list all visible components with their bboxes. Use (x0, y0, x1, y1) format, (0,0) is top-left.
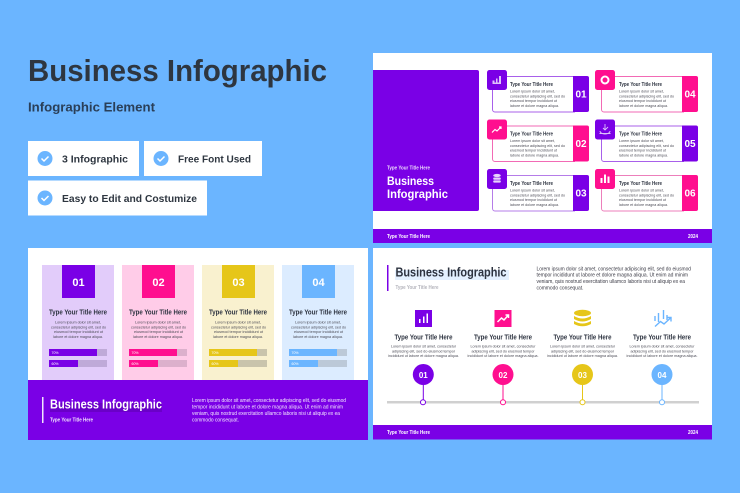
column 01: 60% (52, 362, 59, 366)
step 01 (388, 310, 459, 405)
step 01: adipiscing elit, sed do eiusmod tempor (392, 348, 456, 353)
footer bar: Type Your Title Here (387, 430, 430, 436)
panel: timeline slide (373, 248, 712, 440)
step 02: Type Your Title Here (474, 334, 532, 342)
purple banner: tempor incididunt ut labore et dolore magna aliqua. Ut enim ad minim (192, 404, 343, 410)
step 01: 01 (419, 371, 428, 380)
step 03: Type Your Title Here (554, 334, 612, 342)
card 06: consectetur adipiscing elit, sed do (619, 192, 674, 197)
card 05: 05 (684, 139, 696, 150)
card 04: Type Your Title Here (619, 82, 662, 88)
card 06: Lorem ipsum dolor sit amet, (619, 188, 664, 192)
intro paragraph: commodo consequat. (536, 285, 584, 291)
column 02: Type Your Title Here (129, 310, 187, 316)
card 01: labore et dolore magna aliqua. (510, 103, 559, 108)
card 05: Type Your Title Here (619, 132, 662, 138)
card 04: consectetur adipiscing elit, sed do (619, 93, 674, 98)
feature badge: Free Font Used (144, 141, 262, 176)
purple title block: Business (387, 176, 434, 188)
column 04: 70% (292, 351, 299, 355)
feature badge: Easy to Edit and Costumize: Easy to Edit and Costumize (62, 193, 197, 205)
purple title block: Type Your Title Here (387, 165, 430, 171)
feature badge: 3 Infographic: 3 Infographic (62, 154, 128, 166)
step 03: 03 (578, 371, 587, 380)
card 02: labore et dolore magna aliqua. (510, 152, 559, 158)
column 04: eiusmod tempor incididunt ut (294, 329, 344, 334)
footer bar: 2024 (688, 234, 698, 240)
heading (387, 264, 509, 291)
column 03: consectetur adipiscing elit, sed do (211, 324, 266, 329)
card 04: eiusmod tempor incididunt ut (619, 98, 667, 103)
card 03: Type Your Title Here (510, 181, 553, 187)
footer bar (373, 425, 712, 440)
card 06: Type Your Title Here (619, 181, 662, 187)
card 05: eiusmod tempor incididunt ut (619, 148, 667, 153)
card 01: eiusmod tempor incididunt ut (510, 98, 558, 103)
column 01 (42, 265, 114, 381)
step 04: Type Your Title Here (633, 334, 691, 342)
column 04: Type Your Title Here (289, 310, 347, 316)
purple banner (28, 380, 368, 440)
column 03: 70% (212, 351, 219, 355)
column 03: labore et dolore magna aliqua. (213, 334, 263, 339)
footer bar (373, 229, 712, 243)
step 04 (626, 310, 698, 405)
step 02: adipiscing elit, sed do eiusmod tempor (472, 348, 535, 353)
column 01: 70% (52, 351, 59, 355)
column 02: 70% (132, 351, 139, 355)
panel: six step slide (373, 53, 712, 243)
card 01 (487, 70, 589, 112)
card 04: Lorem ipsum dolor sit amet, (619, 88, 664, 94)
step 01: Type Your Title Here (394, 334, 453, 342)
column 02: labore et dolore magna aliqua. (133, 334, 183, 339)
heading: Business Infographic (396, 264, 506, 280)
card 01: 01 (575, 90, 587, 100)
column 03: Type Your Title Here (209, 310, 267, 316)
card 03: labore et dolore magna aliqua. (510, 202, 559, 207)
card 06 (595, 169, 698, 211)
card 06: labore et dolore magna aliqua. (619, 202, 668, 207)
step 02: incididunt ut labore et dolore magna aliqua. (468, 353, 538, 358)
column 02: consectetur adipiscing elit, sed do (131, 324, 186, 329)
intro paragraph: tempor incididunt ut labore et dolore magna aliqua. Ut enim ad minim (536, 273, 688, 279)
card 01: consectetur adipiscing elit, sed do (510, 93, 565, 98)
intro paragraph (536, 266, 691, 291)
card 06: 06 (684, 188, 696, 200)
column 04: labore et dolore magna aliqua. (293, 334, 343, 339)
step 03: incididunt ut labore et dolore magna aliqua. (547, 353, 618, 358)
intro paragraph: veniam, quis nostrud exercitation ullamco laboris nisi ut aliquip ex ea (536, 279, 685, 285)
column 03: 03 (232, 277, 245, 289)
feature badge: Easy to Edit and Costumize (28, 180, 207, 216)
timeline track (387, 401, 699, 404)
footer bar: Type Your Title Here (387, 234, 430, 240)
column 04: Lorem ipsum dolor sit amet, (295, 320, 341, 324)
card 04 (595, 70, 698, 112)
footer bar: 2024 (688, 430, 698, 436)
feature badge: Free Font Used: Free Font Used (178, 154, 251, 166)
step 03: adipiscing elit, sed do eiusmod tempor (551, 348, 615, 353)
step 02: Lorem ipsum dolor sit amet, consectetur (470, 344, 536, 348)
column 01: 01 (72, 277, 85, 289)
feature badge: 3 Infographic (28, 141, 139, 176)
card 03: eiusmod tempor incididunt ut (510, 197, 558, 202)
card 03 (487, 169, 589, 211)
card 02: Type Your Title Here (510, 132, 553, 138)
column 01: eiusmod tempor incididunt ut (54, 329, 104, 334)
card 05: labore et dolore magna aliqua. (619, 152, 668, 158)
step 01: Lorem ipsum dolor sit amet, consectetur (391, 344, 457, 348)
column 01: Lorem ipsum dolor sit amet, (55, 320, 101, 324)
card 04: labore et dolore magna aliqua. (619, 103, 668, 108)
step 02: 02 (499, 371, 508, 380)
purple banner: commodo consequat. (192, 418, 239, 424)
column 03 (202, 265, 274, 381)
step 02 (468, 310, 538, 405)
purple banner: Lorem ipsum dolor sit amet, consectetur adipiscing elit, sed do eiusmod (192, 398, 346, 404)
column 03: 60% (212, 362, 219, 366)
card 03: 03 (575, 188, 587, 200)
card 02 (487, 120, 589, 162)
card 02: 02 (575, 139, 587, 150)
column 02 (122, 265, 194, 381)
purple banner: veniam, quis nostrud exercitation ullamco laboris nisi ut aliquip ex ea (192, 411, 340, 417)
card 05: Lorem ipsum dolor sit amet, (619, 138, 664, 143)
purple title block: Infographic (387, 189, 449, 201)
step 04: incididunt ut labore et dolore magna aliqua. (626, 353, 698, 358)
card 05: consectetur adipiscing elit, sed do (619, 143, 674, 148)
column 01: consectetur adipiscing elit, sed do (51, 324, 106, 329)
card 03: Lorem ipsum dolor sit amet, (510, 188, 555, 192)
column 01: Type Your Title Here (49, 310, 107, 316)
column 02: 60% (132, 362, 139, 366)
card 04: 04 (684, 90, 696, 100)
purple title block (373, 70, 479, 211)
step 01: incididunt ut labore et dolore magna aliqua. (388, 353, 459, 358)
card 01: Lorem ipsum dolor sit amet, (510, 88, 555, 94)
column 04: 04 (312, 277, 325, 289)
step 04: 04 (658, 371, 667, 380)
heading: Type Your Title Here (396, 285, 439, 291)
card 02: Lorem ipsum dolor sit amet, (510, 138, 555, 143)
title: Business Infographic (28, 53, 327, 88)
column 02: eiusmod tempor incididunt ut (134, 329, 184, 334)
step 04: adipiscing elit, sed do eiusmod tempor (630, 348, 694, 353)
column 02: 02 (152, 277, 165, 289)
column 04: 60% (292, 362, 299, 366)
step 04: Lorem ipsum dolor sit amet, consectetur (630, 344, 695, 348)
card 01: Type Your Title Here (510, 82, 553, 88)
column 01: labore et dolore magna aliqua. (53, 334, 103, 339)
intro paragraph: Lorem ipsum dolor sit amet, consectetur adipiscing elit, sed do eiusmod (536, 266, 691, 272)
subtitle: Infographic Element (28, 100, 156, 114)
card 02: eiusmod tempor incididunt ut (510, 148, 558, 153)
purple banner: Type Your Title Here (50, 417, 93, 423)
panel: four column slide (28, 248, 368, 440)
card 02: consectetur adipiscing elit, sed do (510, 143, 565, 148)
column 02: Lorem ipsum dolor sit amet, (135, 320, 181, 324)
card 06: eiusmod tempor incididunt ut (619, 197, 667, 202)
column 04: consectetur adipiscing elit, sed do (291, 324, 346, 329)
step 03 (547, 310, 618, 405)
column 03: Lorem ipsum dolor sit amet, (215, 320, 261, 324)
card 03: consectetur adipiscing elit, sed do (510, 192, 565, 197)
column 04 (282, 265, 354, 381)
card 05 (595, 120, 698, 162)
step 03: Lorem ipsum dolor sit amet, consectetur (550, 344, 616, 348)
column 03: eiusmod tempor incididunt ut (214, 329, 264, 334)
purple banner: Business Infographic (50, 396, 162, 412)
